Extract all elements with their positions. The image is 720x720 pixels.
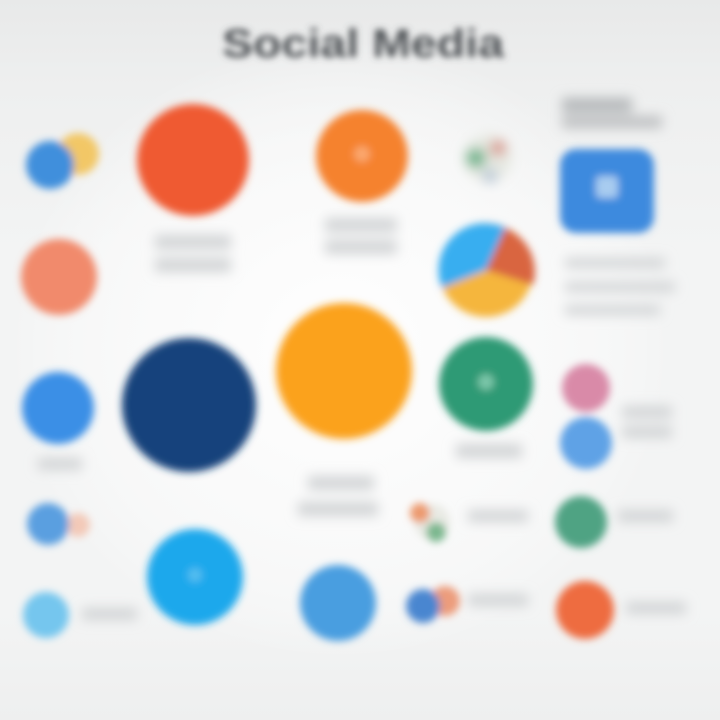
pink and blue stacked icons <box>560 364 612 469</box>
orange circle <box>316 110 408 202</box>
light blue circle <box>23 592 69 638</box>
green icon <box>555 496 607 548</box>
red-orange circle <box>556 581 614 639</box>
small multicolour icon <box>410 503 450 542</box>
large red circle <box>137 104 249 216</box>
blue square icon <box>560 149 654 233</box>
small blue peach icon <box>27 503 90 545</box>
large amber circle <box>276 303 412 439</box>
title: Social Media <box>222 22 505 66</box>
small multicolour icon <box>464 134 512 183</box>
green circle <box>439 337 533 431</box>
blurred text bars <box>38 98 686 620</box>
multicolour pie <box>438 223 535 317</box>
blue circle <box>22 372 94 444</box>
mid blue circle <box>300 565 376 641</box>
salmon circle <box>21 239 97 315</box>
blue orange icon <box>406 586 460 623</box>
icon: blue yellow overlapping circles <box>26 133 99 189</box>
large navy circle <box>122 338 256 472</box>
bright blue circle <box>147 529 243 625</box>
